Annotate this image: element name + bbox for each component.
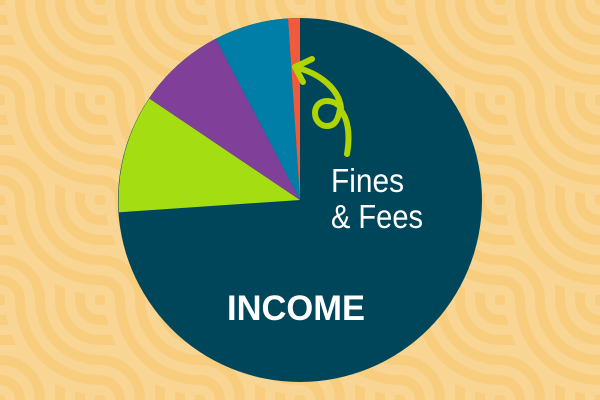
slice: fines and fees bbox=[288, 18, 300, 200]
pie chart bbox=[118, 18, 482, 382]
label: INCOME: INCOME bbox=[227, 289, 365, 328]
label: Fines & Fees: & Fees bbox=[331, 198, 423, 235]
slice: green bbox=[119, 98, 300, 212]
arrow: looped arrow pointing to fines slice bbox=[295, 59, 349, 154]
slice: income bbox=[118, 18, 482, 382]
slice: purple bbox=[149, 39, 300, 200]
label: Fines & Fees bbox=[331, 162, 423, 235]
label: Fines & Fees: Fines bbox=[331, 162, 404, 199]
slice: blue bbox=[216, 18, 300, 200]
